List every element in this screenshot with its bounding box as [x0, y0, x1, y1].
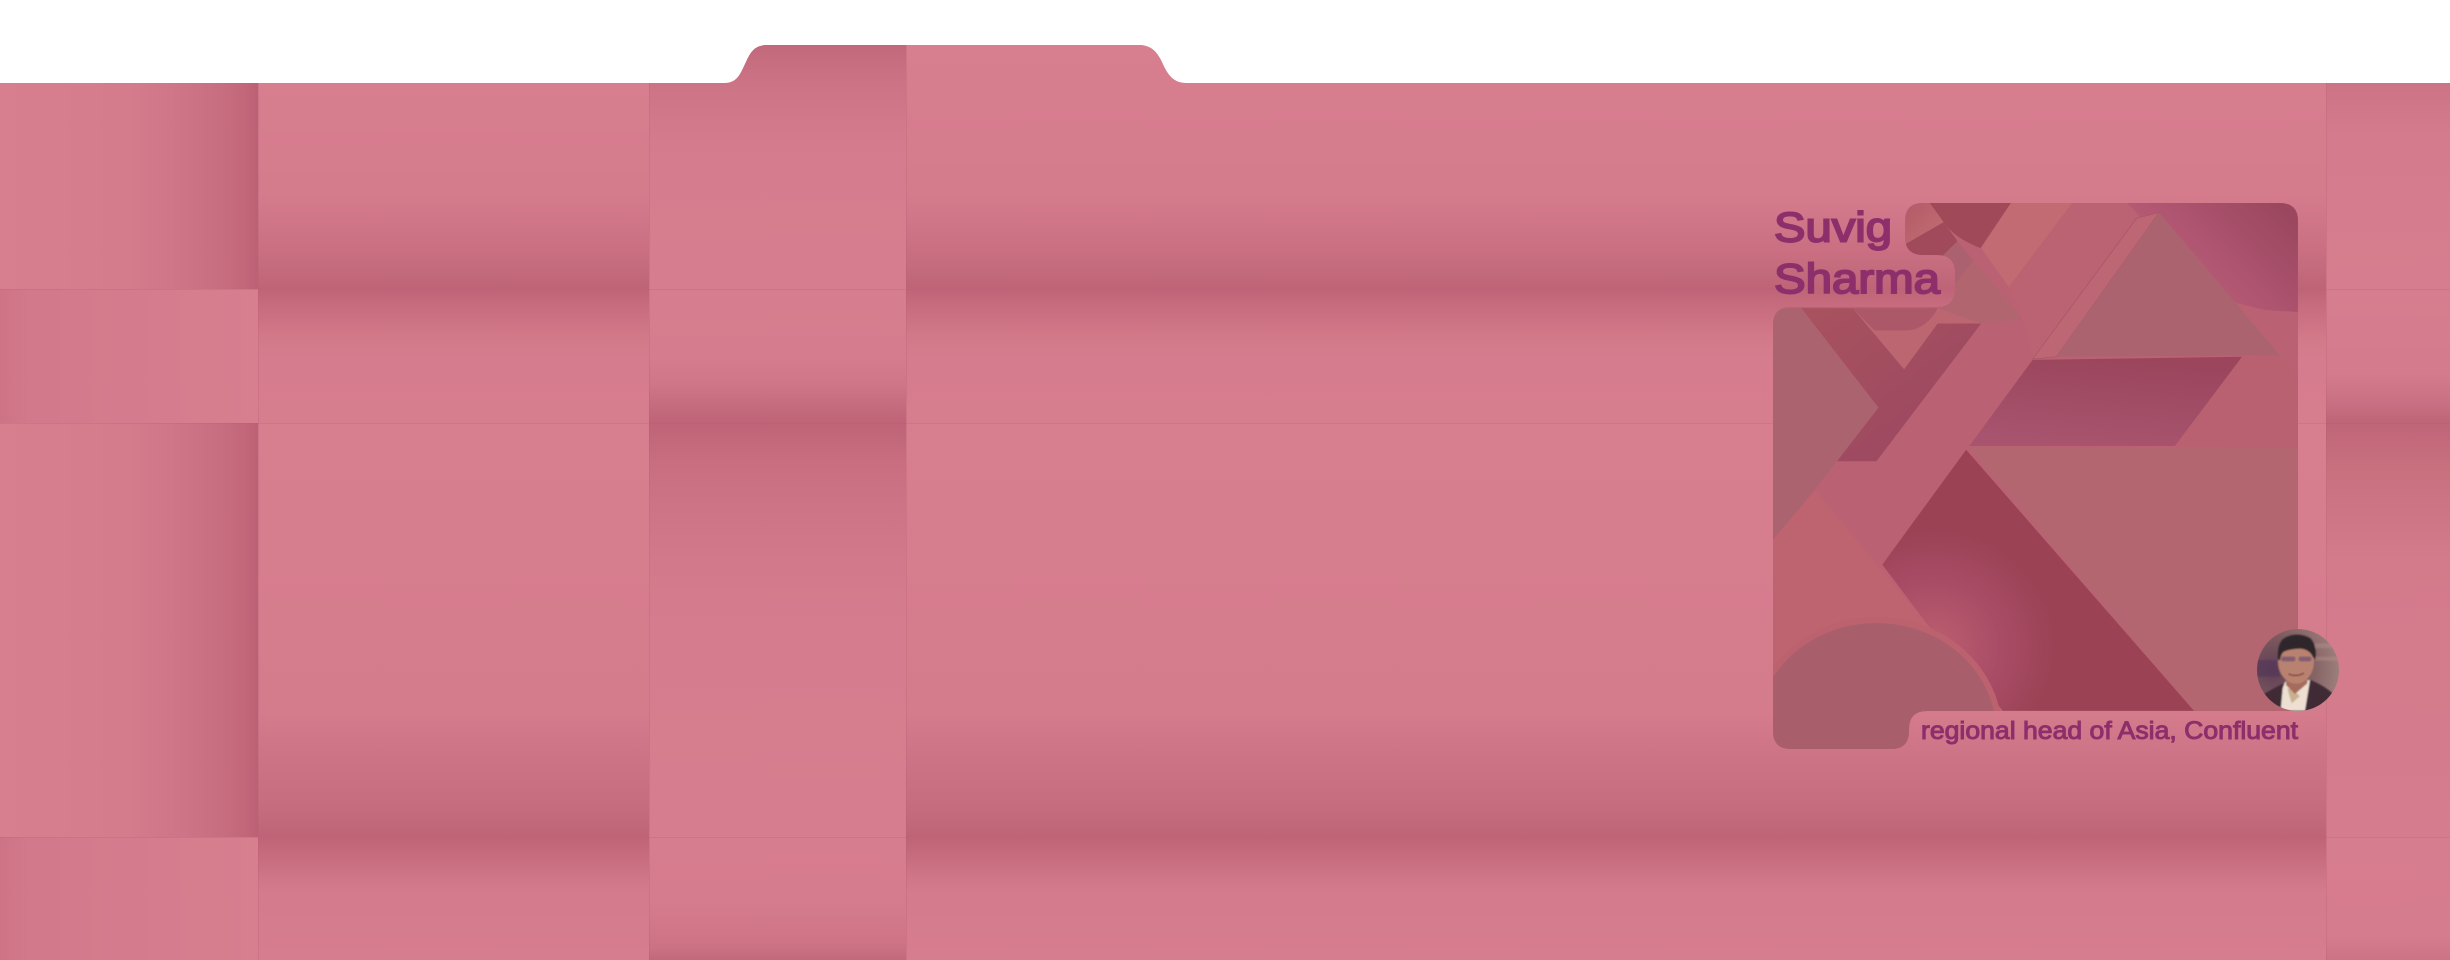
right column cell, row four [2327, 955, 2450, 960]
top-right dark area [2128, 203, 2298, 312]
tab column cell, row three [649, 423, 906, 518]
centre grey triangle [1938, 260, 2023, 323]
lighter triangle under the notch [1938, 310, 1980, 324]
tab column cell, row four [649, 936, 906, 960]
top-left dark facet [1905, 222, 1957, 257]
right column cell, row two [2326, 390, 2450, 423]
lower-left triangle [1773, 508, 1800, 541]
circle fill [1757, 623, 1996, 843]
small centre grey facet [1943, 242, 1973, 283]
mid-right dark parallelogram [1969, 357, 2242, 446]
second column cell, row one [258, 225, 649, 289]
name heading [1774, 204, 1941, 302]
name heading: Suvig [1774, 204, 1892, 250]
wide column cell, row two [906, 289, 2326, 330]
large grey right area [1967, 447, 2298, 711]
job title caption: regional head of Asia, Confluent [1921, 717, 2298, 745]
tab column cell, row two [649, 387, 906, 423]
wide column cell, row three [906, 748, 2326, 837]
upper band lighter wedge [1981, 203, 2072, 287]
right column cell, row one [2327, 83, 2450, 94]
dark Y shape [1801, 308, 1981, 461]
upper band [2009, 203, 2137, 360]
left column cell, row one [181, 83, 258, 289]
left column cell, row four [0, 838, 10, 960]
wide column cell, row four [906, 837, 2326, 876]
icon: portrait photo [2257, 629, 2340, 713]
panel: abstract geometric artwork [1773, 203, 2298, 749]
top dark wedge [1930, 203, 2011, 248]
second column cell, row two [258, 289, 649, 330]
side band of grey triangle [2033, 213, 2159, 359]
top-left lighter facet [1906, 203, 1930, 228]
left column cell, row three [181, 423, 258, 837]
right light facet [2175, 355, 2298, 448]
left column cell, row two [0, 290, 10, 423]
circle ring [1751, 617, 2002, 849]
name heading: Sharma [1774, 255, 1941, 302]
wide column cell, row one [906, 45, 2326, 289]
right column cell, row three [2326, 423, 2450, 528]
curved shadow under the notch [1853, 308, 1938, 330]
grey triangle [2056, 213, 2280, 357]
second column cell, row three [258, 748, 649, 837]
left grey triangle [1773, 308, 1878, 542]
large dark diagonal triangle [1882, 450, 2194, 711]
tab column cell, row one [650, 45, 906, 96]
second column cell, row four [258, 837, 649, 876]
